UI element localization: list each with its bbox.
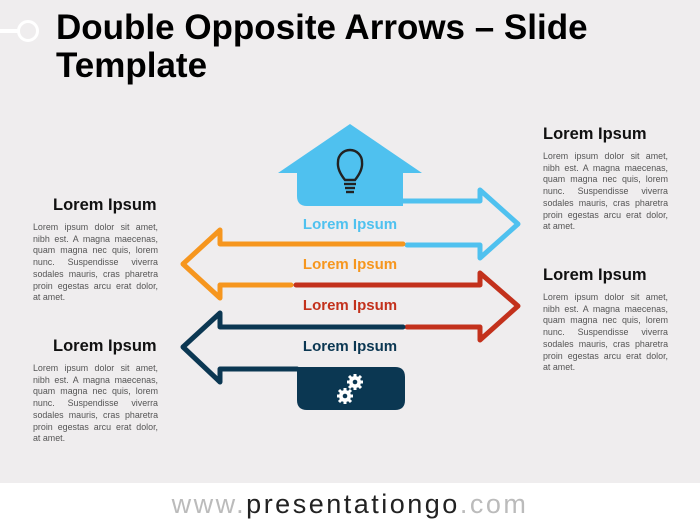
text block left top: Lorem Ipsum: [53, 196, 157, 214]
text block right top: at amet.: [543, 221, 575, 231]
text block right bottom: Lorem ipsum dolor sit amet,: [543, 292, 668, 302]
navy arrow with box: [183, 313, 405, 410]
footer: www.presentationgo.com: [172, 489, 528, 519]
text block left top: nunc. Suspendisse viverra: [33, 257, 158, 267]
text block left top: nibh est. A magna maecenas,: [33, 234, 158, 244]
text block left bottom: nunc. Suspendisse viverra: [33, 398, 158, 408]
text block right bottom: nibh est. A magna maecenas,: [543, 304, 668, 314]
text block right top: nunc. Suspendisse viverra: [543, 186, 668, 196]
text block right top: quam magna nec quis, lorem: [543, 174, 668, 184]
labels: Lorem Ipsum: [303, 216, 397, 233]
text block right bottom: at amet.: [543, 362, 575, 372]
text block left bottom: quam magna nec quis, lorem: [33, 386, 158, 396]
text block right top: Lorem Ipsum: [543, 125, 647, 143]
text block left bottom: nibh est. A magna maecenas,: [33, 375, 158, 385]
text block left top: quam magna nec quis, lorem: [33, 245, 158, 255]
text block right top: Lorem ipsum dolor sit amet,: [543, 151, 668, 161]
icon: gears: [337, 374, 363, 404]
labels: Lorem Ipsum: [303, 256, 397, 273]
footer: [0, 483, 700, 525]
text block left top: at amet.: [33, 292, 65, 302]
orange arrow: [183, 230, 403, 298]
text block right bottom: sodales mauris, cras pharetra: [543, 339, 668, 349]
blue house with arrow: [278, 124, 518, 258]
icon: light bulb: [338, 150, 362, 192]
logo icon: [0, 20, 39, 42]
labels: [303, 216, 397, 355]
text block right top: sodales mauris, cras pharetra: [543, 198, 668, 208]
title: Template: [56, 46, 207, 85]
text block right top: [543, 125, 668, 231]
text block right bottom: [543, 266, 668, 372]
text block right bottom: quam magna nec quis, lorem: [543, 315, 668, 325]
text block left bottom: Lorem Ipsum: [53, 337, 157, 355]
text block right bottom: proin egestas arcu erat dolor,: [543, 351, 668, 361]
title: Double Opposite Arrows – Slide: [56, 8, 588, 47]
text block left bottom: sodales mauris, cras pharetra: [33, 410, 158, 420]
text block right bottom: nunc. Suspendisse viverra: [543, 327, 668, 337]
labels: Lorem Ipsum: [303, 297, 397, 314]
text block left bottom: at amet.: [33, 433, 65, 443]
labels: Lorem Ipsum: [303, 338, 397, 355]
text block right bottom: Lorem Ipsum: [543, 266, 647, 284]
text block left top: proin egestas arcu erat dolor,: [33, 281, 158, 291]
text block left bottom: Lorem ipsum dolor sit amet,: [33, 363, 158, 373]
text block right top: nibh est. A magna maecenas,: [543, 163, 668, 173]
text block left bottom: proin egestas arcu erat dolor,: [33, 422, 158, 432]
red arrow: [296, 273, 518, 340]
text block left top: Lorem ipsum dolor sit amet,: [33, 222, 158, 232]
text block left top: [33, 196, 158, 302]
text block right top: proin egestas arcu erat dolor,: [543, 210, 668, 220]
title: [56, 8, 588, 85]
text block left bottom: [33, 337, 158, 443]
text block left top: sodales mauris, cras pharetra: [33, 269, 158, 279]
